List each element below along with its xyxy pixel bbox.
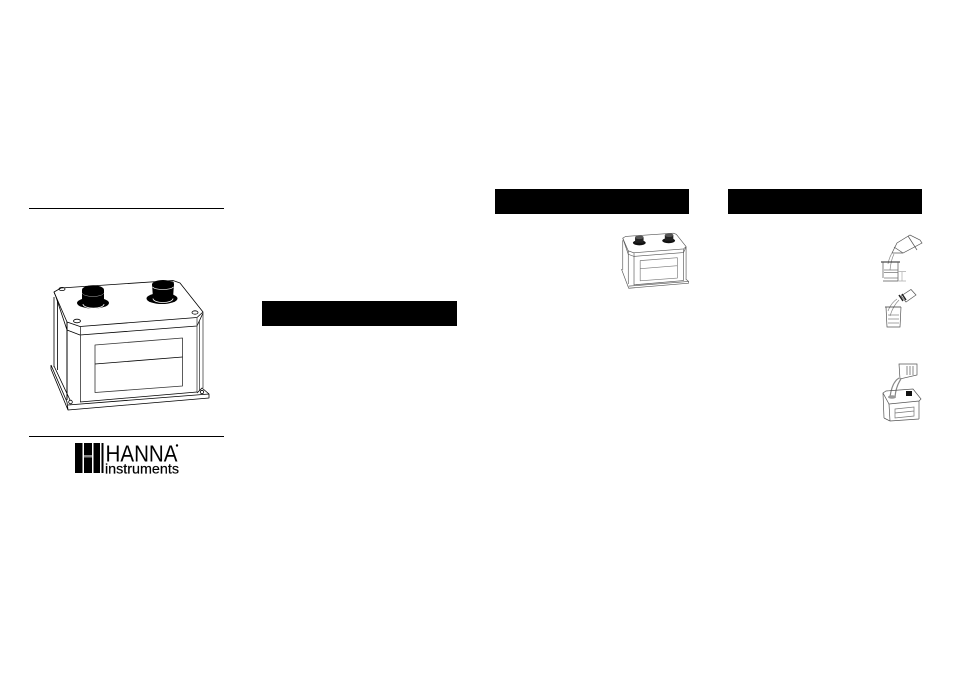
heading bar: third column (495, 189, 689, 214)
heading bar: middle column (262, 301, 457, 326)
illustration: small enclosure box (621, 233, 689, 288)
logo wordmark: HANNA (106, 440, 178, 466)
icon: right connector (146, 280, 178, 304)
illustration: bottle pouring into beaker (881, 235, 922, 281)
cover top rule (29, 208, 224, 209)
logo subline: instruments (105, 460, 179, 476)
window panel (95, 338, 182, 392)
illustration: dropper bottle pouring into beaker (885, 290, 916, 327)
mounting holes (59, 287, 65, 291)
cover bottom rule (29, 436, 224, 437)
icon: left connector (77, 285, 109, 308)
logo mark (75, 443, 104, 473)
illustration: large enclosure box (51, 280, 209, 410)
base plate (51, 365, 209, 410)
illustration: beaker pouring into small enclosure (883, 364, 921, 421)
heading bar: fourth column (728, 189, 922, 214)
logo registered mark (176, 444, 178, 447)
logo: Hanna Instruments (75, 440, 179, 476)
